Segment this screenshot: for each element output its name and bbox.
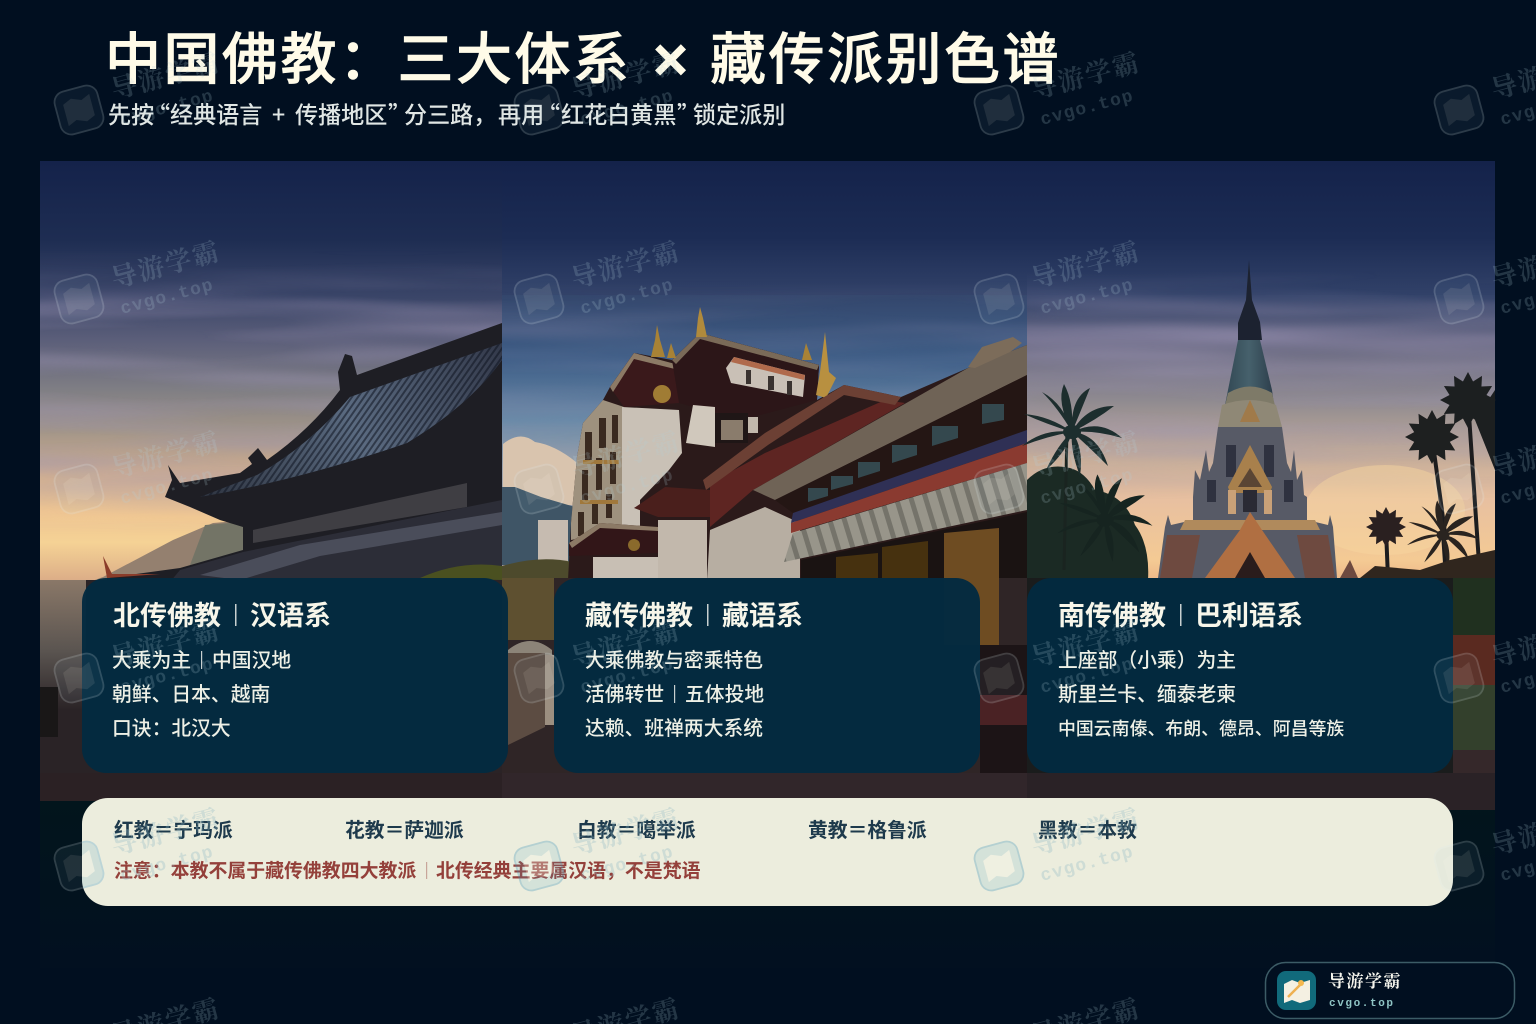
text: Tibetan Buddhism facts: 五体投地 (685, 678, 764, 707)
watermark grid: cvgo.top (1038, 276, 1136, 320)
watermark grid: 导游学霸 (566, 231, 684, 296)
watermark grid: cvgo.top (578, 655, 676, 699)
heading: Northern Buddhism: 北传佛教 (113, 594, 221, 633)
watermark grid: 导游学霸 (1026, 421, 1144, 486)
subtitle: ” (388, 96, 411, 130)
brand badge (1266, 962, 1514, 1018)
legend items: 花教＝萨迦派 (345, 814, 464, 843)
watermark row crossing the legend: cvgo.top (578, 843, 676, 887)
watermark grid: cvgo.top (118, 466, 216, 510)
brand url: cvgo.top (1329, 998, 1395, 1010)
watermark grid: 导游学霸 (1026, 231, 1144, 296)
watermark icon on the dark margin beside the legend (52, 839, 106, 893)
panel: Northern Buddhism (82, 578, 508, 773)
watermark grid: 导游学霸 (566, 610, 684, 675)
heading: Tibetan Buddhism: 藏传佛教 (585, 594, 693, 633)
text: Northern Buddhism facts (112, 644, 291, 741)
watermark grid: cvgo.top (578, 276, 676, 320)
heading: Southern Buddhism (1058, 594, 1303, 633)
text: Southern Buddhism facts: 上座部（小乘）为主 (1058, 644, 1236, 673)
watermark grid: cvgo.top (1038, 87, 1136, 131)
text: Northern Buddhism facts: 大乘为主 (112, 644, 191, 673)
watermark grid: 导游学霸 (1026, 610, 1144, 675)
subtitle: + (272, 96, 285, 130)
watermark row crossing the legend: cvgo.top (1038, 843, 1136, 887)
legend items (114, 814, 1137, 843)
watermark grid: 导游学霸 (106, 421, 224, 486)
legend items: 红教＝宁玛派 (114, 814, 233, 843)
watermark grid: cvgo.top (118, 87, 216, 131)
left scene: Han temple roof (40, 267, 502, 801)
icon: map (1277, 971, 1316, 1010)
watermark row crossing the legend: 导游学霸 (1026, 798, 1144, 863)
title: 中国佛教：三大体系 (105, 15, 632, 96)
subtitle: 先按 (108, 96, 154, 130)
middle scene: Tibetan monastery (502, 280, 1027, 801)
panel: Tibetan Buddhism (554, 578, 980, 773)
watermark row crossing the legend (82, 806, 1138, 892)
text: Southern Buddhism facts: 斯里兰卡、缅泰老柬 (1058, 678, 1236, 707)
building base silhouette (568, 333, 1027, 580)
title: × (653, 26, 688, 93)
subtitle: “ (147, 96, 170, 130)
brand name: 导游学霸 (1328, 967, 1402, 992)
text: Southern Buddhism facts (1058, 644, 1344, 741)
watermark grid: cvgo.top (578, 466, 676, 510)
legend: colour-to-school key (82, 798, 1453, 906)
subtitle: 锁定派别 (693, 96, 785, 130)
subtitle: “ (537, 96, 560, 130)
subtitle: 传播地区 (295, 96, 387, 130)
note: 北传经典主要属汉语，不是梵语 (436, 856, 701, 883)
text: Tibetan Buddhism facts (585, 644, 764, 741)
upper sky shared across all scenes (40, 161, 1495, 301)
text: Northern Buddhism facts: 口诀：北汉大 (112, 712, 231, 741)
subtitle: 再用 (498, 96, 544, 130)
watermark grid: cvgo.top (118, 276, 216, 320)
legend items: 黑教＝本教 (1038, 814, 1137, 843)
subtitle: 分三路， (404, 96, 496, 130)
heading: Tibetan Buddhism (585, 594, 803, 633)
heading: Northern Buddhism (113, 594, 331, 633)
text: Southern Buddhism facts: 中国云南傣、布朗、德昂、阿昌等族 (1058, 715, 1344, 741)
watermark grid: 导游学霸 (106, 42, 224, 107)
photo band: three temple scenes (40, 161, 1496, 810)
title (105, 15, 1061, 96)
subtitle: 红花白黄黑 (561, 96, 676, 130)
heading: Tibetan Buddhism: 藏语系 (722, 594, 803, 633)
watermark grid: 导游学霸 (1026, 42, 1144, 107)
text: Northern Buddhism facts: 朝鲜、日本、越南 (112, 678, 270, 707)
watermark grid: cvgo.top (1038, 466, 1136, 510)
subtitle: ” (677, 96, 700, 130)
note (114, 856, 701, 883)
text: Tibetan Buddhism facts: 达赖、班禅两大系统 (585, 712, 763, 741)
subtitle (108, 96, 785, 130)
watermark grid: cvgo.top (118, 655, 216, 699)
watermark grid: cvgo.top (578, 87, 676, 131)
panel: Southern Buddhism (1027, 578, 1453, 773)
watermark grid: 导游学霸 (106, 610, 224, 675)
heading: Southern Buddhism: 巴利语系 (1195, 594, 1303, 633)
watermark grid: cvgo.top (1038, 655, 1136, 699)
right scene: Theravada stupa with palms (1022, 260, 1496, 810)
text: Northern Buddhism facts: 中国汉地 (212, 644, 291, 673)
text: Tibetan Buddhism facts: 大乘佛教与密乘特色 (585, 644, 763, 673)
watermark row crossing the legend: 导游学霸 (566, 798, 684, 863)
watermark grid: 导游学霸 (566, 42, 684, 107)
legend items: 白教＝噶举派 (577, 814, 696, 843)
title: 藏传派别色谱 (710, 15, 1061, 96)
watermark row crossing the legend: cvgo.top (118, 843, 216, 887)
lower fade of the photo band (40, 800, 1495, 968)
legend items: 黄教＝格鲁派 (808, 814, 927, 843)
subtitle: 经典语言 (170, 96, 262, 130)
watermark grid: 导游学霸 (566, 421, 684, 486)
watermark row crossing the legend: 导游学霸 (106, 798, 224, 863)
heading: Northern Buddhism: 汉语系 (250, 594, 331, 633)
text: Tibetan Buddhism facts: 活佛转世 (585, 678, 664, 707)
watermark grid: 导游学霸 (106, 231, 224, 296)
note: 注意：本教不属于藏传佛教四大教派 (114, 856, 416, 883)
heading: Southern Buddhism: 南传佛教 (1058, 594, 1166, 633)
